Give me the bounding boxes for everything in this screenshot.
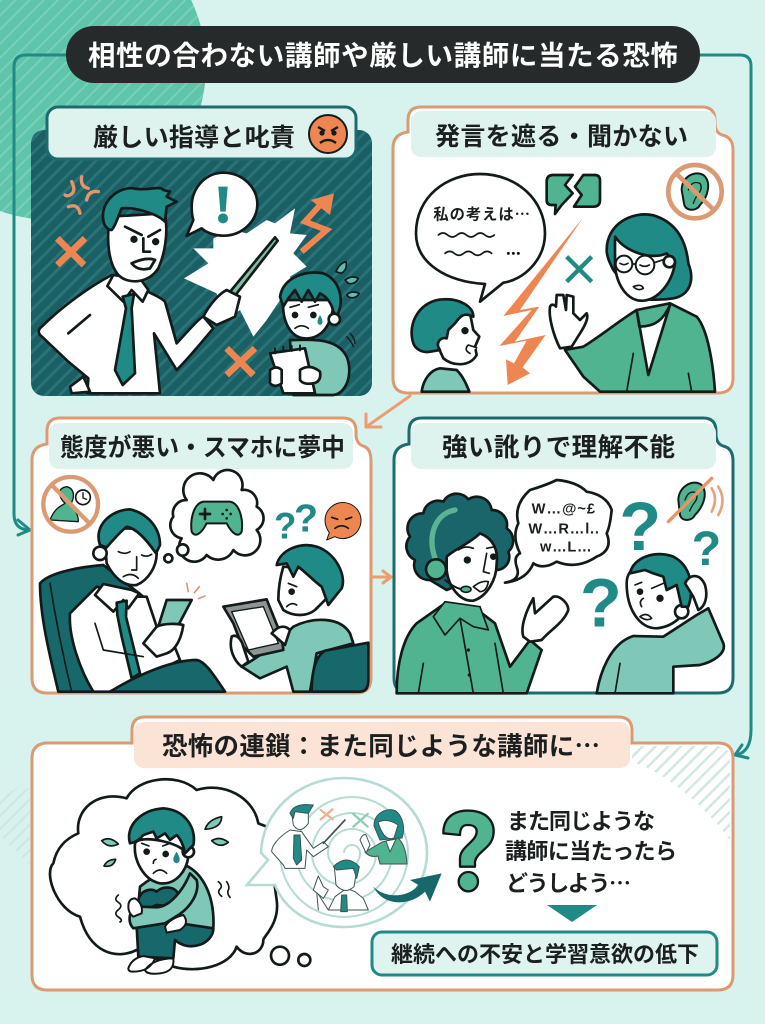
phone notification marks <box>187 583 205 599</box>
heading text: 発言を遮る・聞かない <box>435 123 688 151</box>
icon: large question mark <box>443 811 494 891</box>
worry text: また同じような <box>507 809 655 834</box>
icon: ear crossed <box>668 165 722 218</box>
notepad <box>270 348 315 393</box>
bubble text <box>433 202 530 255</box>
accent speech bubble <box>505 480 612 583</box>
tablet <box>223 599 283 657</box>
man hand <box>143 624 183 657</box>
student body <box>597 608 724 693</box>
hands <box>128 898 186 933</box>
worry text line 3: どうしよう… <box>506 866 631 898</box>
left question mark: ? <box>580 566 622 642</box>
second question mark: ? <box>294 497 318 541</box>
strict teacher mini <box>272 805 368 868</box>
instructor face <box>447 533 497 601</box>
connector: title to panel 5 <box>695 55 751 755</box>
arrowhead: left connector <box>18 520 30 535</box>
hair <box>103 188 177 230</box>
panel: chain of fear <box>32 717 733 990</box>
chair <box>40 565 143 692</box>
panel heading <box>134 722 630 768</box>
instructor hair <box>406 494 513 590</box>
sweat drops <box>102 817 228 866</box>
shiver marks <box>116 882 230 922</box>
instructor body <box>397 603 542 693</box>
worry text line 2: 講師に当たったら <box>505 839 677 864</box>
title bar <box>66 26 700 83</box>
teacher face <box>615 237 675 301</box>
panel: strict instruction <box>31 107 372 396</box>
sad speech bubble <box>325 503 361 540</box>
knees <box>138 888 178 908</box>
student face <box>627 564 687 628</box>
panel heading <box>49 423 353 469</box>
icon: crossed ear <box>668 478 722 522</box>
man head <box>105 528 157 585</box>
boy face <box>435 313 479 364</box>
exclamation mark <box>218 187 228 212</box>
memory figures <box>272 805 368 912</box>
X marks <box>57 238 255 375</box>
sweat drops <box>336 262 359 298</box>
connector: title to panel 3 <box>14 55 70 530</box>
X mark <box>567 257 592 282</box>
speech bubble <box>416 174 545 302</box>
student hands <box>231 627 290 667</box>
phone <box>157 600 192 632</box>
pointing teacher mini <box>313 860 368 912</box>
student hand <box>685 576 706 610</box>
teacher body <box>565 303 715 392</box>
collar <box>107 275 148 302</box>
question marks: ? <box>274 505 296 546</box>
conclusion text: 継続への不安と学習意欲の低下 <box>391 942 699 967</box>
torso <box>137 865 213 928</box>
legs <box>137 918 213 958</box>
tie <box>117 601 140 678</box>
face details <box>125 227 160 269</box>
teacher body <box>39 275 213 393</box>
arrow: panel 3 to panel 4 <box>372 571 391 583</box>
worry text <box>505 809 677 898</box>
instructor hand <box>522 596 568 642</box>
head <box>135 839 188 883</box>
boy hair <box>412 299 473 352</box>
thought cloud <box>170 470 264 562</box>
icon: down triangle <box>547 905 597 922</box>
illustration: teacher on phone and student <box>40 470 368 692</box>
heading text: 厳しい指導と叱責 <box>93 124 295 152</box>
student body <box>290 340 349 395</box>
collar <box>95 584 139 612</box>
conclusion box <box>372 932 717 975</box>
boy body <box>422 368 469 392</box>
zigzag arrow <box>302 203 327 252</box>
bubble text: 私の考えは… <box>433 202 530 224</box>
head <box>108 213 166 281</box>
teacher hand <box>203 290 240 325</box>
man body <box>70 587 180 692</box>
panel: interrupting <box>393 107 733 393</box>
burst <box>184 208 307 337</box>
shoes <box>128 956 173 974</box>
tie <box>115 294 135 385</box>
speech bubble <box>187 173 257 236</box>
teacher hand <box>550 295 587 348</box>
thought cloud <box>50 779 277 969</box>
icon: broken speech bubble <box>547 175 600 214</box>
bubble text line 2: W…R…l.. <box>528 521 599 537</box>
teacher hair <box>607 214 691 300</box>
decorative green circle <box>0 0 206 220</box>
student head <box>283 300 333 338</box>
heading text: 強い訛りで理解不能 <box>442 434 675 462</box>
heading text: 態度が悪い・スマホに夢中 <box>60 433 345 462</box>
panel heading <box>411 423 716 469</box>
illustration: teacher scolding student <box>39 173 359 395</box>
panel heading tab <box>47 107 356 159</box>
icon: no teacher time <box>43 477 98 532</box>
question marks: ? <box>619 489 661 565</box>
lightning arrow <box>499 217 583 385</box>
illustration: instructor with accent and confused student <box>397 478 724 693</box>
seat <box>312 643 368 692</box>
student hair <box>630 554 691 607</box>
trousers <box>110 660 225 692</box>
sleeve <box>130 873 197 928</box>
spiral memory bubble <box>247 778 427 927</box>
heading text: 恐怖の連鎖：また同じような講師に… <box>162 726 600 763</box>
hatch in corner <box>632 746 730 840</box>
icon: angry face <box>309 115 347 153</box>
headset <box>432 510 455 558</box>
pointer <box>215 237 278 315</box>
anger mark <box>65 177 98 213</box>
student body <box>242 620 353 692</box>
bubble text: W…@~£ <box>532 501 595 517</box>
illustration: teacher stopping student <box>412 165 722 392</box>
arrow: panel 2 to panel 3 <box>366 396 410 427</box>
decorative hatch bottom left <box>0 785 30 865</box>
icon: curved arrow <box>373 873 442 902</box>
illustration: crouching student in thought cloud <box>50 779 310 974</box>
woman mini figure <box>360 810 407 864</box>
panel heading <box>411 111 716 157</box>
arrowhead: right connector <box>735 745 748 758</box>
bubble text line 3: w…L… <box>539 540 592 556</box>
right question mark: ? <box>692 522 721 576</box>
student head <box>278 567 328 615</box>
icon: game controller <box>191 502 242 535</box>
title text: 相性の合わない講師や厳しい講師に当たる恐怖 <box>88 40 678 71</box>
panel: bad attitude <box>32 418 371 693</box>
panel: strong accent <box>394 418 733 693</box>
